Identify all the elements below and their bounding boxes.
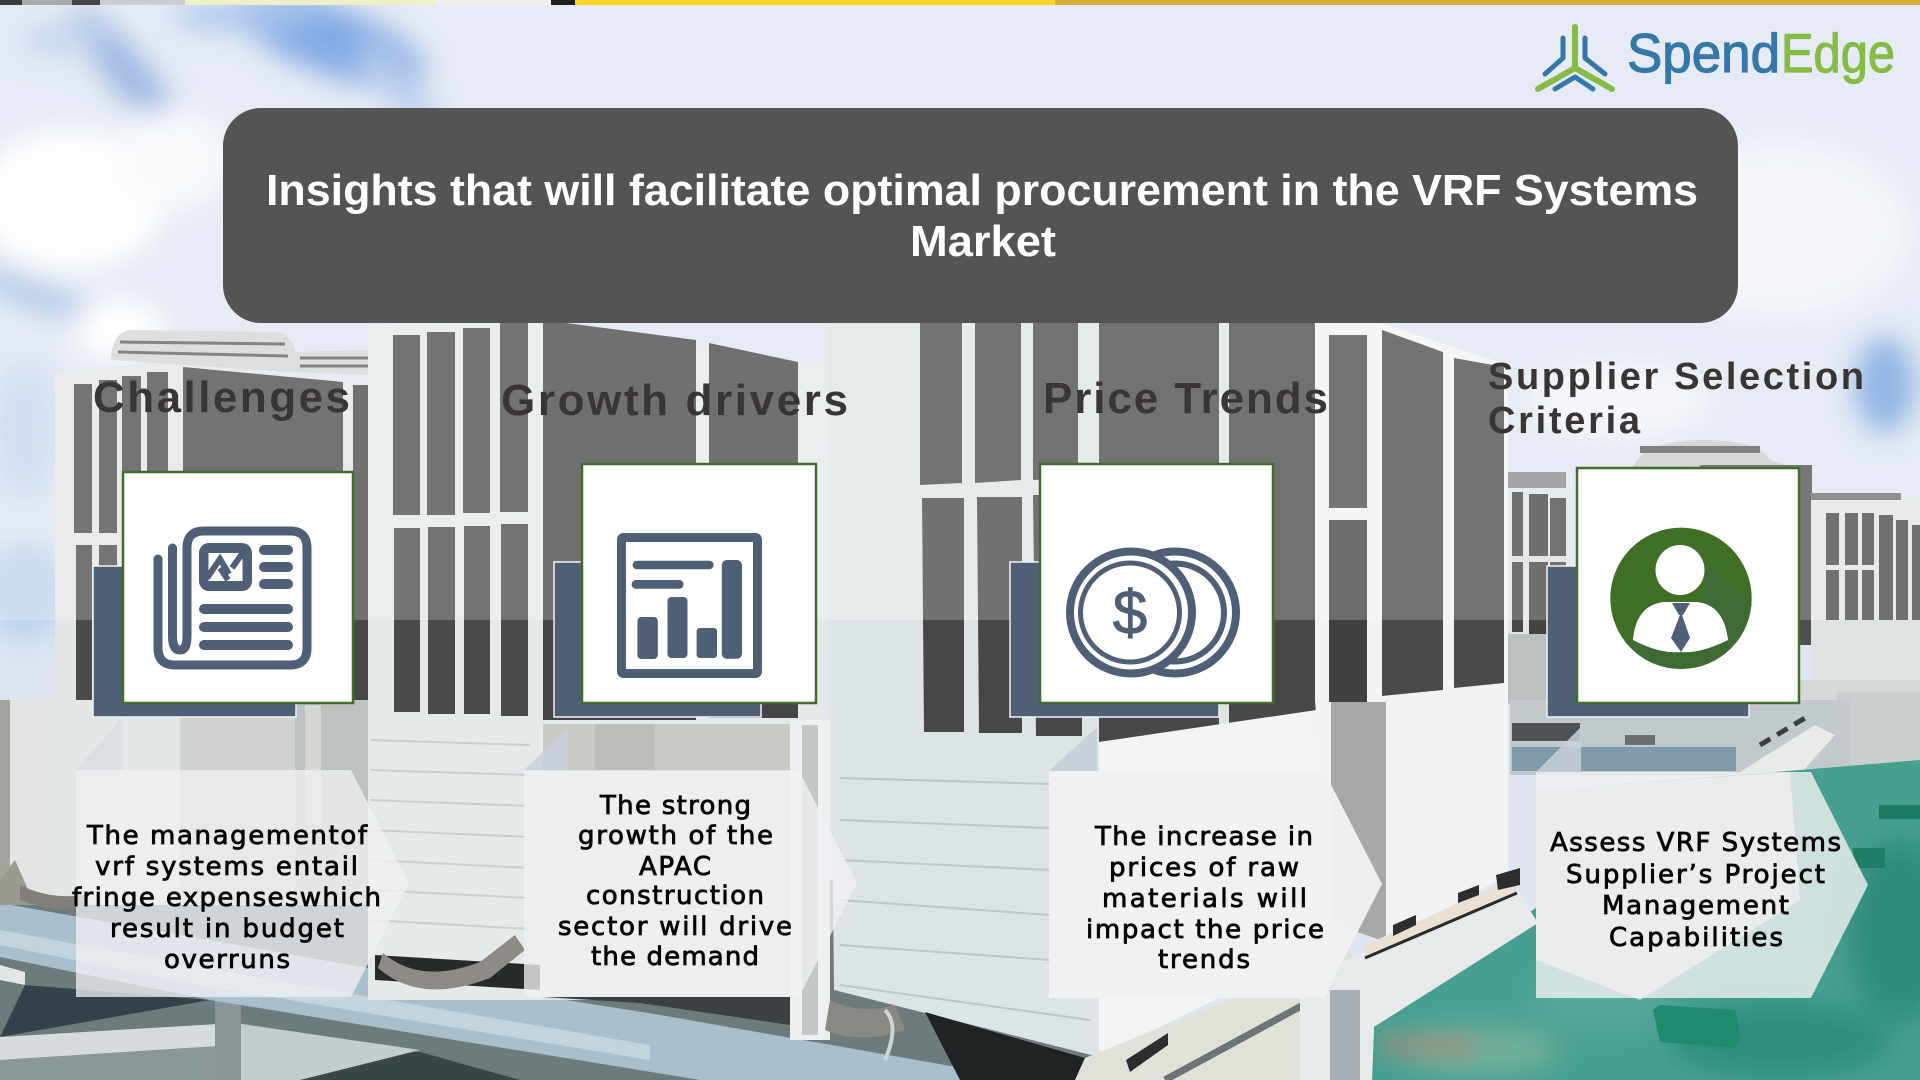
icon card bbox=[123, 472, 353, 703]
description: Assess VRF Systems bbox=[1550, 828, 1841, 858]
description: trends bbox=[1158, 945, 1250, 975]
icon card backing bbox=[1010, 562, 1219, 717]
logo mark bbox=[1538, 27, 1612, 89]
text arrow bbox=[1049, 771, 1382, 998]
icon card bbox=[1577, 468, 1799, 703]
unit A bbox=[0, 330, 368, 909]
title text: Market bbox=[910, 217, 1056, 266]
teal roof floor bbox=[1300, 760, 1920, 1080]
logo wordmark: Spend bbox=[1627, 22, 1780, 84]
heading: Growth drivers: Growth drivers bbox=[501, 376, 848, 425]
icon: coins bbox=[1070, 552, 1236, 674]
text arrow bbox=[524, 771, 857, 997]
description: APAC bbox=[639, 852, 711, 882]
description: prices of raw bbox=[1109, 853, 1299, 883]
icon card backing bbox=[1547, 566, 1749, 717]
panel: supplier selection criteria bbox=[1488, 356, 1868, 998]
text arrow bbox=[76, 770, 409, 997]
panel: price trends bbox=[1010, 374, 1382, 998]
description: Capabilities bbox=[1609, 923, 1783, 953]
connector wedge bbox=[524, 727, 569, 770]
heading: Supplier Selection Criteria: Supplier Selection bbox=[1488, 356, 1864, 398]
top strip bbox=[0, 0, 1920, 5]
unit C bbox=[825, 323, 1374, 1080]
icon: business person bbox=[1610, 528, 1752, 669]
description: growth of the bbox=[578, 821, 773, 851]
description: materials will bbox=[1102, 884, 1307, 914]
description: result in budget bbox=[110, 914, 344, 944]
description: fringe expenseswhich bbox=[72, 883, 381, 913]
description: The strong bbox=[599, 791, 751, 821]
pale box behind the fourth arrow bbox=[1536, 772, 1800, 1000]
heading: Supplier Selection Criteria: Criteria bbox=[1488, 400, 1641, 442]
icon: report chart bbox=[622, 538, 758, 674]
icon card backing bbox=[93, 566, 296, 717]
description: vrf systems entail bbox=[95, 852, 358, 882]
unit D bbox=[1300, 323, 1538, 1080]
logo wordmark: Edge bbox=[1781, 22, 1895, 84]
connector wedge bbox=[1049, 727, 1097, 771]
icon: newspaper bbox=[158, 531, 307, 665]
panel: growth drivers bbox=[501, 376, 857, 997]
far units on the right bbox=[1506, 440, 1920, 780]
description: construction bbox=[586, 881, 764, 911]
icon card bbox=[582, 464, 816, 703]
connector wedge bbox=[1536, 727, 1581, 772]
icon card bbox=[1040, 464, 1273, 703]
icon: coins: $ bbox=[1113, 579, 1147, 648]
title panel bbox=[223, 108, 1738, 323]
faint connector wedge bbox=[76, 718, 122, 770]
description: Supplier’s Project bbox=[1566, 860, 1825, 890]
heading: Price Trends: Price Trends bbox=[1043, 374, 1328, 423]
text arrow bbox=[1536, 772, 1868, 998]
description: The managementof bbox=[86, 821, 368, 851]
icon card backing bbox=[554, 562, 761, 717]
dimming wash over the top of the photo bbox=[0, 0, 1920, 620]
description: The increase in bbox=[1094, 822, 1313, 852]
description: Management bbox=[1602, 891, 1789, 921]
description: impact the price bbox=[1086, 915, 1324, 945]
beams at lower left bbox=[0, 880, 1100, 1080]
description: the demand bbox=[591, 942, 759, 972]
description: sector will drive bbox=[558, 912, 792, 942]
panel: challenges bbox=[72, 373, 409, 997]
title text: Insights that will facilitate optimal procurement in the VRF Systems bbox=[266, 166, 1698, 215]
unit B bbox=[368, 320, 830, 1040]
heading: Challenges: Challenges bbox=[93, 373, 350, 422]
description: overruns bbox=[164, 945, 290, 975]
logo: SpendEdge bbox=[1538, 22, 1895, 89]
